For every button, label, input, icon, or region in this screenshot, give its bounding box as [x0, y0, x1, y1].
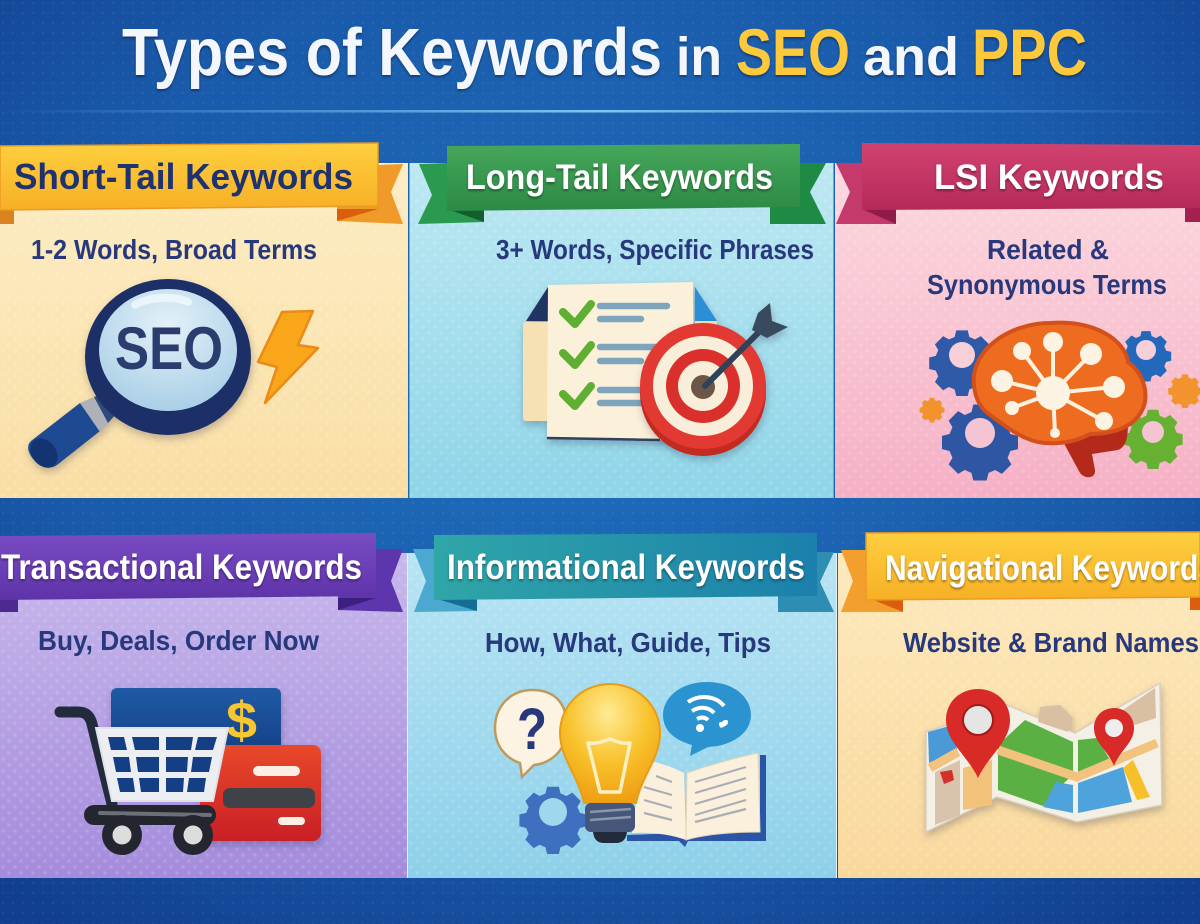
icon: gears [920, 330, 1200, 480]
subtitle: Buy, Deals, Order Now [38, 625, 319, 656]
ribbon: transactional: Transactional Keywords [1, 548, 362, 587]
icon: checklist [523, 282, 717, 440]
icon: question bubble [495, 690, 567, 777]
icon: shopping cart [60, 712, 228, 855]
title: PPC [972, 15, 1087, 89]
subtitle: 1-2 Words, Broad Terms [31, 234, 317, 265]
ribbon: short-tail: Short-Tail Keywords [14, 156, 353, 197]
icon: open book [627, 753, 766, 847]
title: Types of Keywords [122, 15, 662, 90]
ribbon: LSI: LSI Keywords [934, 158, 1164, 197]
ribbon: long-tail: Long-Tail Keywords [466, 158, 773, 197]
title: and [863, 27, 959, 87]
subtitle: Related & [987, 234, 1109, 265]
icon: target with arrow [640, 303, 788, 456]
panel: informational keywords [407, 533, 837, 878]
icon: dollar card: $ [226, 692, 257, 750]
subtitle: How, What, Guide, Tips [485, 627, 771, 658]
icon: brain network [974, 323, 1145, 477]
ribbon: navigational [841, 532, 1200, 612]
ribbon: long-tail [418, 144, 826, 224]
icon: red credit card [200, 745, 321, 841]
title: SEO [736, 15, 850, 89]
icon: dollar card [111, 688, 281, 757]
icon: gear [519, 787, 587, 854]
icon: magnifying glass SEO: SEO [115, 315, 223, 382]
title: in [676, 27, 722, 87]
icon: wifi chat bubble [663, 682, 751, 756]
ribbon: transactional [0, 533, 403, 612]
icon: magnifying glass SEO [25, 279, 251, 473]
panel: transactional keywords [0, 533, 407, 878]
ribbon: short-tail [0, 143, 403, 224]
panel: short-tail keywords [0, 143, 408, 498]
panel: long-tail keywords [409, 144, 834, 498]
subtitle: Synonymous Terms [927, 269, 1167, 300]
ribbon: LSI [836, 143, 1200, 224]
panel: navigational keywords [838, 532, 1200, 878]
subtitle [927, 234, 1167, 300]
icon: small map pin [1094, 708, 1134, 766]
subtitle: 3+ Words, Specific Phrases [496, 234, 814, 265]
icon: lightning bolt [258, 311, 318, 403]
icon: question bubble: ? [517, 697, 547, 762]
panel: LSI keywords [835, 143, 1200, 498]
title [122, 15, 1087, 90]
icon: light bulb [560, 684, 660, 843]
icon: large map pin [946, 689, 1010, 778]
ribbon: informational [413, 533, 834, 612]
icon: folded map [926, 683, 1162, 832]
ribbon: informational: Informational Keywords [447, 548, 805, 587]
